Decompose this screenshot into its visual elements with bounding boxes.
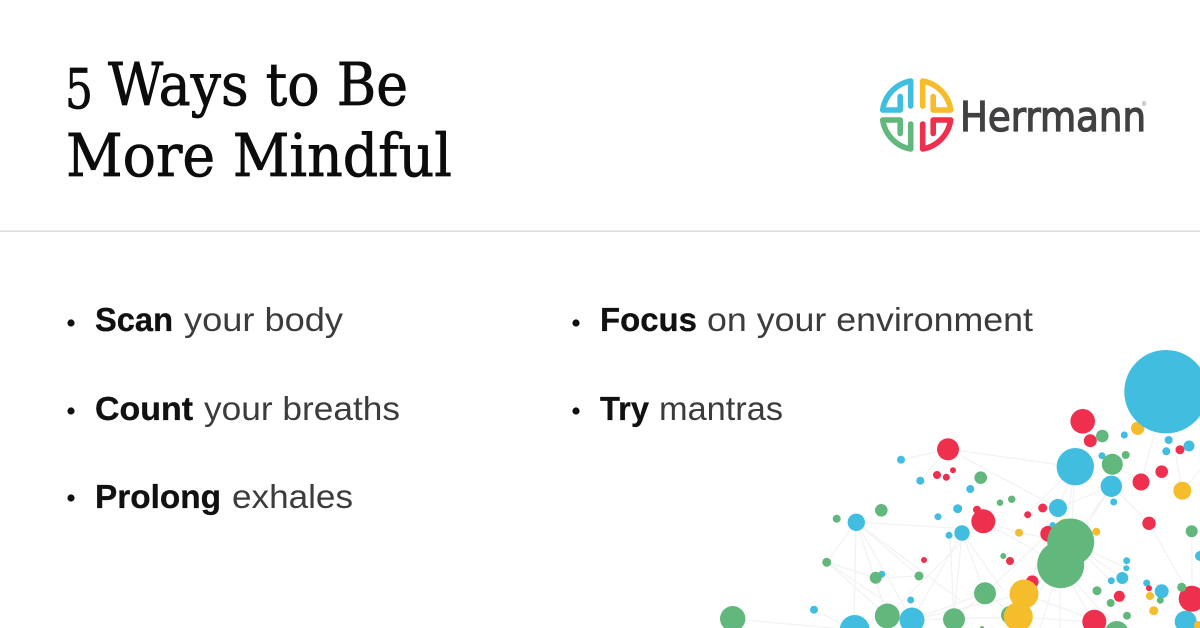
item: Try mantras: Try — [600, 390, 650, 427]
item: Scan your body: your body — [184, 301, 344, 338]
logo: Herrmann — [883, 81, 1147, 149]
title — [65, 50, 452, 190]
title: More Mindful — [66, 121, 452, 190]
item: Focus on your environment — [572, 301, 1033, 338]
item: Scan your body — [67, 301, 344, 338]
nodes: top-right cluster — [1057, 350, 1200, 561]
item: Count your breaths: your breaths — [204, 390, 400, 427]
item: Focus on your environment: Focus — [600, 301, 697, 338]
nodes: centre cluster — [946, 471, 1100, 628]
nodes: bottom-right cluster — [1082, 557, 1200, 628]
icon: four-colour knot — [883, 81, 951, 149]
bullet list: left column — [67, 301, 400, 515]
item: Try mantras — [572, 390, 783, 427]
item: Prolong exhales: Prolong — [95, 478, 221, 515]
bullet list: right column — [572, 301, 1033, 427]
nodes: left cluster — [720, 438, 965, 628]
network graphic — [720, 350, 1200, 628]
item: Prolong exhales: exhales — [232, 478, 353, 515]
item: Focus on your environment: on your environment — [707, 301, 1033, 338]
item: Scan your body: Scan — [95, 301, 173, 338]
registered mark: ® — [1142, 101, 1147, 108]
logo wordmark: Herrmann — [960, 93, 1146, 141]
item: Count your breaths: Count — [95, 390, 193, 427]
title: 5 — [65, 57, 93, 121]
title: Ways to Be — [108, 50, 408, 119]
item: Prolong exhales — [67, 478, 353, 515]
item: Try mantras: mantras — [659, 390, 783, 427]
item: Count your breaths — [67, 390, 400, 427]
